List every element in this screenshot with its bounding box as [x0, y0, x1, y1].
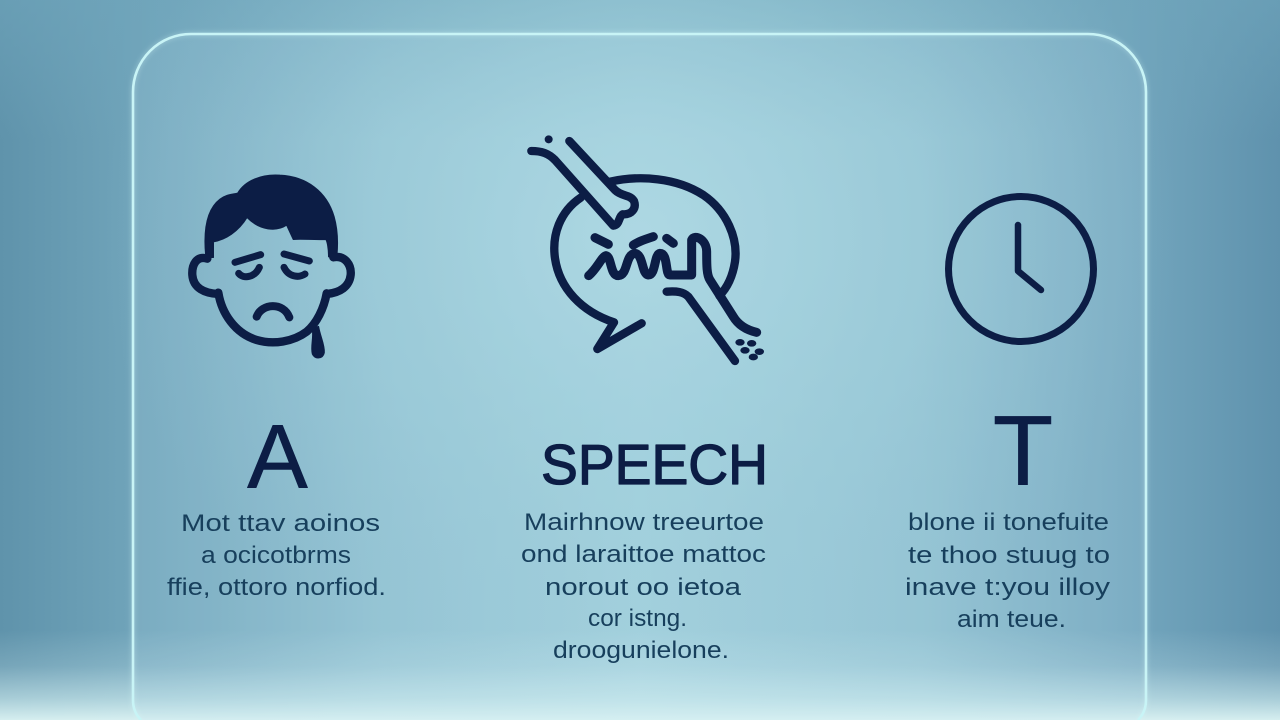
text block: left description: ffie, ottoro norfiod.	[167, 574, 386, 601]
heading: SPEECH: SPEECH	[541, 433, 768, 497]
text block: right description	[905, 509, 1111, 633]
icon: speech bubble with bone and waves	[531, 135, 764, 361]
text block: left description: a ocicotbrms	[201, 542, 351, 569]
heading: T: T	[993, 395, 1053, 506]
panel: rounded glass card	[133, 34, 1146, 720]
text block: right description: inave t:you illoy	[905, 574, 1111, 601]
text block: centre description	[521, 509, 766, 664]
text block: centre description: ond laraittoe mattoc	[521, 541, 766, 568]
text block: centre description: cor istng.	[588, 605, 687, 632]
heading: A: A	[247, 407, 308, 508]
text block: right description: te thoo stuug to	[908, 542, 1110, 569]
icon: sad face	[192, 175, 351, 358]
text block: left description: Mot ttav aoinos	[181, 510, 380, 537]
icon: clock	[948, 196, 1094, 342]
text block: centre description: Mairhnow treeurtoe	[524, 509, 764, 536]
text block: right description: aim teue.	[957, 606, 1066, 633]
text block: centre description: norout oo ietoa	[545, 574, 741, 601]
text block: centre description: droogunielone.	[553, 637, 729, 664]
text block: left description	[167, 510, 386, 601]
text block: right description: blone ii tonefuite	[908, 509, 1109, 536]
